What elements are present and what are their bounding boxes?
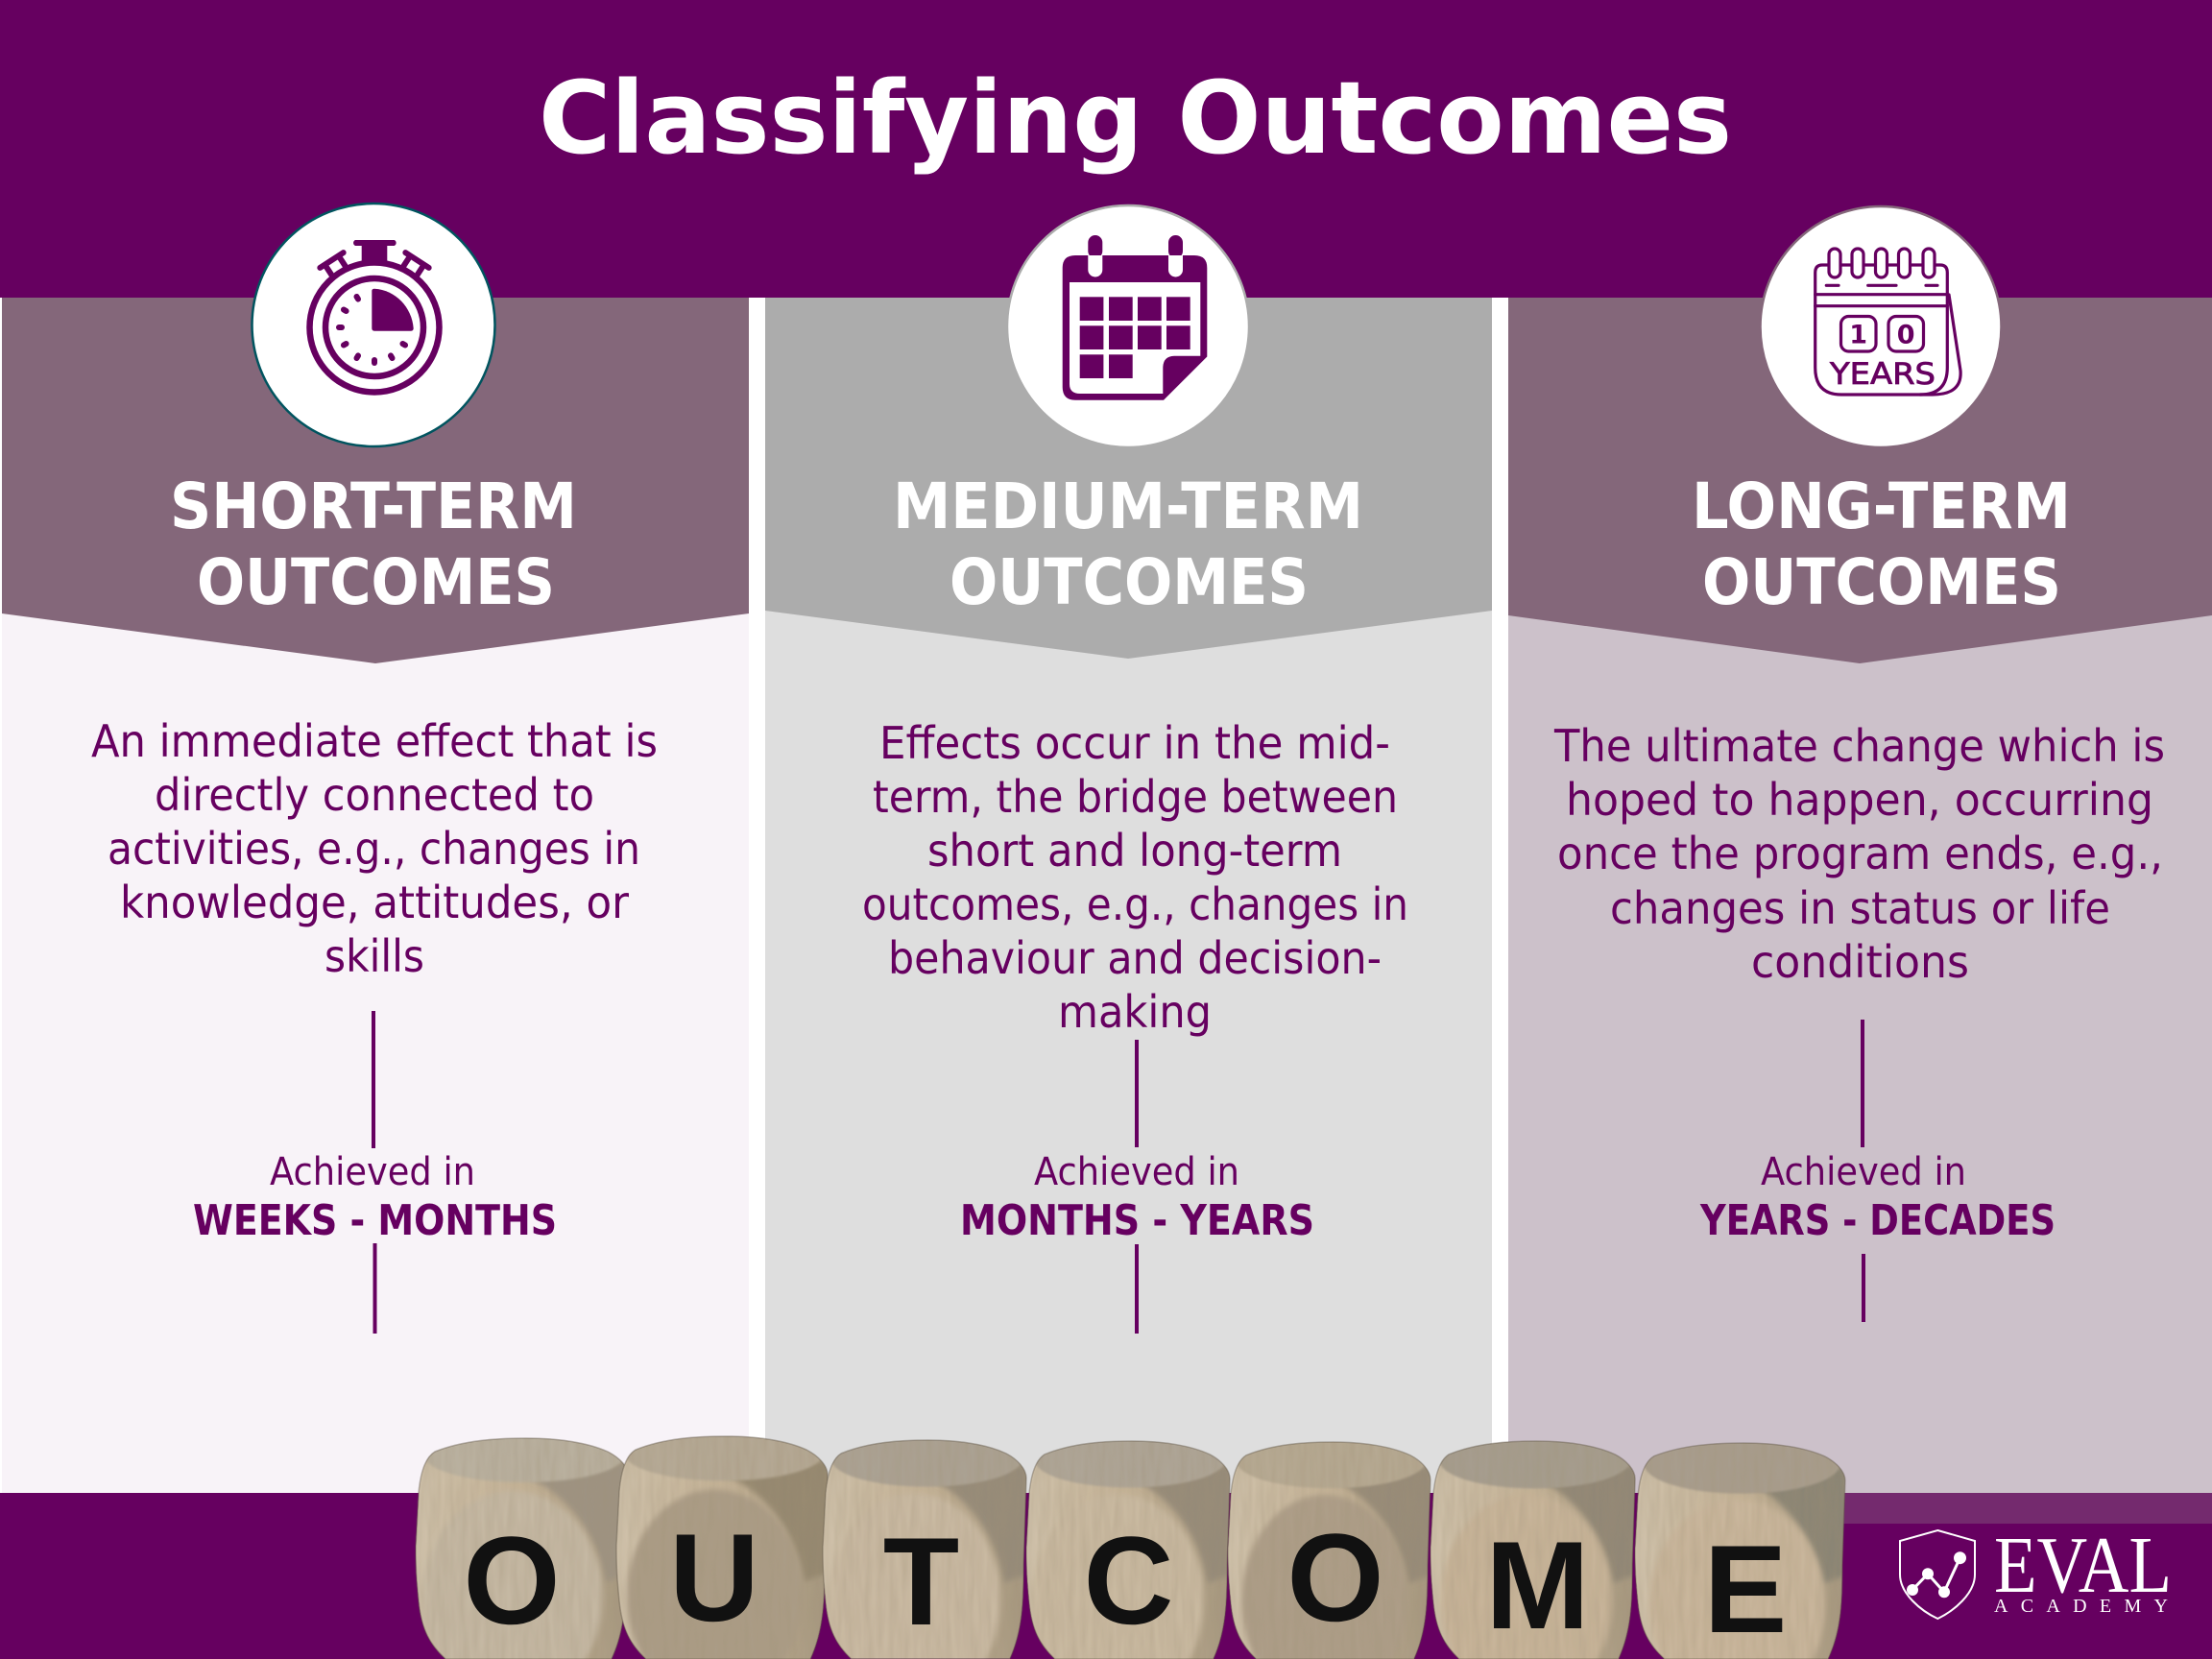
panel: medium-term outcomes bbox=[765, 298, 1492, 1493]
title: Classifying Outcomes bbox=[539, 60, 1732, 177]
die: O: O bbox=[1286, 1507, 1384, 1647]
icon: ten-year calendar: YEARS bbox=[1829, 357, 1936, 392]
heading banner: short-term: SHORT-TERM bbox=[170, 469, 577, 543]
die: U bbox=[616, 1429, 830, 1659]
description: medium-term: short and long-term bbox=[927, 825, 1342, 877]
footer band bbox=[0, 1493, 2212, 1659]
description: medium-term: behaviour and decision- bbox=[888, 932, 1382, 984]
icon: ten-year calendar: 0 bbox=[1897, 321, 1915, 349]
die: U: U bbox=[669, 1507, 759, 1647]
heading banner: short-term bbox=[2, 298, 749, 663]
description: short-term: directly connected to bbox=[155, 769, 594, 821]
description: long-term: changes in status or life bbox=[1610, 882, 2110, 934]
logo: Eval Academy bbox=[1900, 1521, 2172, 1619]
timeframe: months to years: Achieved in bbox=[1034, 1150, 1239, 1194]
description: medium-term bbox=[862, 717, 1408, 1038]
photo: wooden dice spelling OUTCOME bbox=[416, 1429, 1848, 1659]
die: O bbox=[416, 1431, 632, 1659]
description: medium-term: making bbox=[1058, 986, 1212, 1038]
die: O bbox=[1228, 1435, 1433, 1659]
icon: calendar bbox=[1007, 205, 1249, 447]
description: long-term: hoped to happen, occurring bbox=[1566, 774, 2153, 826]
description: medium-term: term, the bridge between bbox=[873, 771, 1398, 823]
heading banner: medium-term bbox=[765, 298, 1492, 659]
die: T bbox=[823, 1433, 1029, 1659]
die: M bbox=[1431, 1433, 1638, 1659]
timeframe: years to decades: YEARS - DECADES bbox=[1699, 1196, 2056, 1245]
die: C bbox=[1026, 1434, 1233, 1659]
description: long-term: once the program ends, e.g., bbox=[1557, 828, 2163, 879]
description: long-term: The ultimate change which is bbox=[1553, 720, 2165, 772]
die: C: C bbox=[1084, 1510, 1173, 1650]
heading banner: short-term: OUTCOMES bbox=[197, 545, 555, 619]
description: short-term: activities, e.g., changes in bbox=[108, 823, 640, 875]
description: short-term: knowledge, attitudes, or bbox=[120, 877, 629, 928]
description: long-term bbox=[1553, 720, 2165, 988]
description: short-term bbox=[91, 715, 658, 982]
icon: stopwatch bbox=[252, 204, 495, 446]
logo wordmark: EVAL bbox=[1994, 1521, 2172, 1610]
description: medium-term: Effects occur in the mid- bbox=[879, 717, 1390, 769]
die: E: E bbox=[1704, 1519, 1787, 1659]
heading banner: long-term bbox=[1508, 298, 2212, 663]
timeframe: weeks to months: WEEKS - MONTHS bbox=[193, 1196, 557, 1245]
description: medium-term: outcomes, e.g., changes in bbox=[862, 878, 1408, 930]
timeframe: weeks to months: Achieved in bbox=[270, 1150, 475, 1194]
title banner bbox=[0, 0, 2212, 298]
timeframe: months to years bbox=[960, 1040, 1314, 1334]
logo wordmark: ACADEMY bbox=[1994, 1596, 2168, 1617]
panel: short-term outcomes bbox=[2, 298, 749, 1493]
die: M: M bbox=[1485, 1515, 1590, 1655]
timeframe: weeks to months bbox=[193, 1011, 557, 1334]
panel: long-term outcomes bbox=[1508, 298, 2212, 1493]
description: short-term: skills bbox=[325, 930, 424, 982]
timeframe: months to years: MONTHS - YEARS bbox=[960, 1196, 1314, 1245]
icon: ten-year calendar bbox=[1761, 206, 2001, 447]
description: long-term: conditions bbox=[1751, 936, 1969, 988]
die: T: T bbox=[883, 1511, 959, 1651]
heading banner: medium-term: OUTCOMES bbox=[950, 545, 1309, 619]
heading banner: long-term: OUTCOMES bbox=[1702, 545, 2061, 619]
die: O: O bbox=[463, 1510, 561, 1650]
heading banner: long-term: LONG-TERM bbox=[1692, 469, 2071, 543]
timeframe: years to decades bbox=[1699, 1020, 2056, 1322]
die: E bbox=[1635, 1435, 1848, 1659]
timeframe: years to decades: Achieved in bbox=[1761, 1150, 1966, 1194]
icon: ten-year calendar: 1 bbox=[1849, 321, 1867, 349]
heading banner: medium-term: MEDIUM-TERM bbox=[893, 469, 1363, 543]
logo shield bbox=[1900, 1530, 1975, 1619]
description: short-term: An immediate effect that is bbox=[91, 715, 658, 767]
